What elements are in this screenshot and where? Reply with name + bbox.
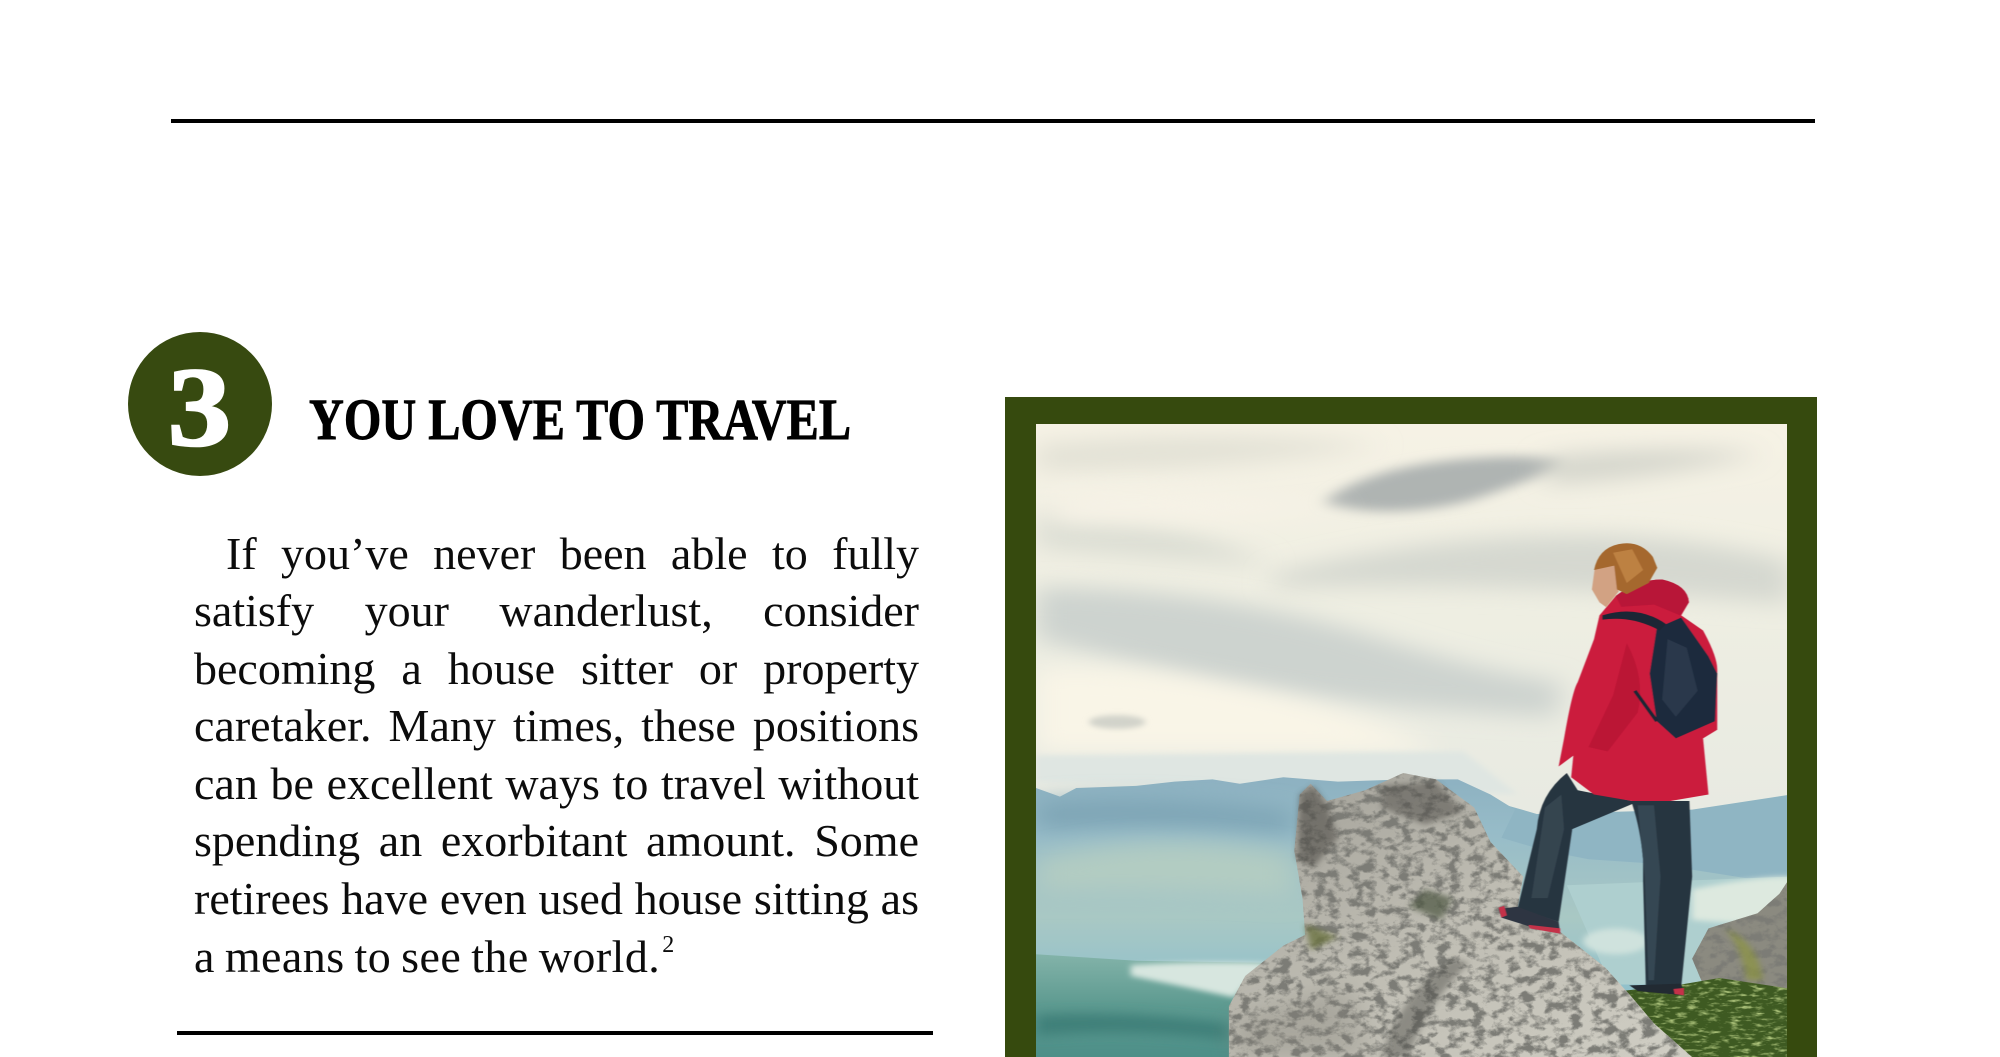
main mountains: [1036, 777, 1745, 990]
body text: a means to see the world.2: [194, 931, 675, 982]
right valley: [1567, 877, 1791, 985]
body text: can be excellent ways to travel without: [194, 758, 919, 809]
trousers: [1518, 773, 1692, 987]
head: [1592, 564, 1619, 607]
photo: [1036, 424, 1791, 1057]
green frame: [1005, 397, 1817, 1057]
heading: YOU LOVE TO TRAVEL: [309, 387, 851, 452]
valley floor: [1036, 954, 1272, 1057]
main rock: [1229, 773, 1692, 1057]
figure: hiker: [1499, 543, 1717, 995]
jacket: [1559, 579, 1717, 801]
right small rock: [1692, 882, 1787, 988]
body text: spending an exorbitant amount. Some: [194, 815, 919, 866]
backpack: [1650, 617, 1717, 738]
body text: becoming a house sitter or property: [194, 643, 919, 694]
body text: satisfy your wanderlust, consider: [194, 585, 919, 636]
grass: [1621, 978, 1791, 1057]
clouds: [1322, 456, 1567, 511]
number badge: 3: 3: [168, 346, 231, 470]
body text: caretaker. Many times, these positions: [194, 700, 919, 751]
distant right ridge: [1502, 795, 1787, 878]
body text: retirees have even used house sitting as: [194, 873, 919, 924]
body text: [194, 528, 919, 982]
body text: If you’ve never been able to fully: [226, 528, 919, 578]
photo panel: hiker in red jacket on a rock, framed in green: [1005, 397, 1817, 1057]
shoes: [1499, 907, 1560, 934]
